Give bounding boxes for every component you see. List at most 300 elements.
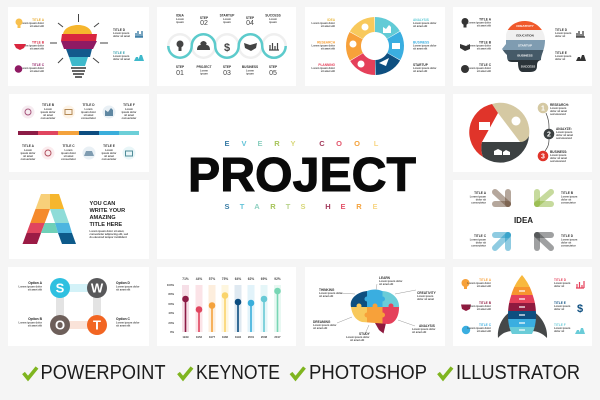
rocket fins [498,312,547,338]
tagline: starts here: E [340,202,346,211]
chart value tracks [182,285,281,332]
arrow labels: TITLE B [561,191,574,195]
brain labels: ANALYSIS [419,324,435,328]
left labels: sit amet elit [30,69,44,73]
arrow labels: dolor sit [561,198,571,202]
A panel heading: AMAZING [90,215,116,221]
ring icons [350,24,400,68]
bottom labels: STEP [223,65,232,69]
bottom labels: STEP [269,65,278,69]
brain labels: LEARN [379,276,391,280]
timeline bottom labels [21,144,116,161]
rocket left labels: TITLE A [479,278,492,282]
step badges: 1 [541,106,545,112]
step badges: 2 [547,132,551,138]
timeline top labels: ipsum dolor [81,110,96,114]
head left labels: sit amet elit [477,24,491,28]
head right labels and icons: dolor sit [555,57,565,61]
timeline top labels: consectetur [81,116,96,120]
A panel body text [90,229,129,239]
top labels: SUCCESS [265,14,281,18]
step connector [545,113,549,151]
chart percentages: 57% [209,277,215,281]
brain labels: dolor sit amet [417,297,434,301]
SWOT circles: O [55,318,65,332]
rocket right labels: TITLE F [554,323,566,327]
chart percentages: 75% [222,277,228,281]
A panel heading [90,201,125,228]
SWOT labels: sit amet elit [28,324,42,328]
arrow labels: Lorem ipsum [470,238,487,242]
timeline bottom labels: consectetur [102,157,116,161]
timeline top labels: Lorem [85,107,93,111]
panel: timeline [9,94,149,172]
head left labels: sit amet elit [477,69,491,73]
arrow labels: TITLE D [561,234,574,238]
panel: lightbulb infographic [8,7,149,86]
brain puzzle pieces [350,290,400,324]
letter A mosaic [22,194,76,244]
panel: triangle cycle [453,94,592,172]
check: photoshop [291,368,304,378]
A panel heading: YOU CAN [90,201,115,207]
arrow green [537,192,551,204]
brain labels: THINKING [319,288,335,292]
timeline top labels: sit amet [43,113,53,117]
chart percentages: 62% [248,277,254,281]
tagline: every cool: Y [290,139,296,148]
arrow brown [495,192,508,204]
SWOT labels: sit amet elit [116,324,130,328]
top labels: Lorem [223,17,232,21]
top labels [176,14,281,27]
arrow labels: Lorem ipsum [470,194,487,198]
head layer labels [516,24,535,68]
ring left labels [312,18,336,73]
rocket right labels [554,278,571,333]
brain labels: Lorem ipsum dolor [313,323,336,327]
tagline: every cool: L [374,139,379,148]
ring left labels: Lorem ipsum dolor [312,44,335,48]
brain labels: sit amet elit [313,326,327,330]
brain labels: sit amet elit [412,330,426,334]
rocket left labels: sit amet elit [477,329,491,333]
head layer labels: SUCCESS [521,64,535,68]
head right labels and icons [555,28,586,61]
timeline top labels: TITLE F [123,103,135,107]
SWOT labels: Lorem ipsum dolor [116,320,140,324]
chart percentages [182,277,281,281]
rocket right labels: Lorem ipsum [554,281,571,285]
rocket left labels [468,278,492,333]
step labels: BUSINESS: [550,150,567,154]
right labels [113,28,130,61]
chart percentages: 71% [182,277,189,281]
brain labels: sit amet elit [319,294,333,298]
timeline bottom labels: ipsum dolor [102,151,116,155]
step labels: Lorem ipsum [556,130,573,134]
brain labels: sit amet elit [350,338,364,342]
label: powerpoint: POWERPOINT [40,362,166,384]
head layer labels: EDUCATION [516,34,534,38]
chart y axis: 80% [168,292,175,296]
SWOT circles: T [93,318,101,332]
ring left labels: IDEA [327,18,336,22]
right icons [134,31,144,61]
timeline top labels: sit amet [84,113,94,117]
tagline: starts here: T [286,202,291,211]
left icons [14,18,26,73]
wave light circles [168,34,286,58]
check: powerpoint [24,368,37,378]
rocket right labels: TITLE D [554,278,567,282]
check: keynote [178,368,192,378]
arrow labels: TITLE C [474,234,487,238]
SWOT labels: sit amet elit [28,288,42,292]
chart x axis: 1982 [222,335,229,339]
bottom labels: Lorem [246,68,255,72]
panel: lollipop chart [157,267,296,346]
arrow labels: consectetur [471,244,486,248]
tagline: starts here: T [240,202,245,211]
red segment [469,104,498,157]
step labels: sed eiusmod [556,136,572,140]
chart y axis: 20% [168,321,175,325]
arrow labels: Lorem ipsum [561,238,578,242]
ring left labels: sit amet elit [321,69,335,73]
ring right labels: BUSINESS [413,40,429,44]
chart y axis: 60% [168,302,175,306]
head right labels and icons: Lorem ipsum [555,31,572,35]
timeline bottom labels: sit amet [64,154,74,158]
head left labels: TITLE C [479,63,492,67]
SWOT labels: Lorem ipsum dolor [18,284,42,288]
tagline: starts here: R [356,202,362,211]
tagline: every cool: R [274,139,280,148]
panel: central title [157,94,445,259]
right labels: TITLE D [113,28,126,32]
arrow labels: Lorem ipsum [561,194,578,198]
footer: software list [24,362,580,384]
left labels: sit amet elit [30,24,44,28]
SWOT connectors [56,284,101,329]
ring right labels: Lorem ipsum dolor [413,21,436,25]
step labels: sed eiusmod [550,159,566,163]
wave icons: $ [224,42,230,54]
chart x axis: 1949 [182,335,189,339]
tagline: starts here: H [325,202,331,211]
panel: cycle ring [305,7,445,86]
timeline bottom labels: TITLE A [22,144,35,148]
timeline bottom labels: TITLE E [103,144,115,148]
arrow grey [537,235,551,248]
brain labels: CREATIVITY [417,291,437,295]
segment icons [479,116,520,155]
right labels: Lorem ipsum [113,54,130,58]
ring right labels: sit amet elit [413,24,427,28]
timeline top labels: sit amet [124,113,134,117]
chart percentages: 64% [235,277,241,281]
timeline bottom labels: sit amet [23,154,33,158]
A panel heading: WRITE YOUR [90,208,125,214]
check: illustrator [438,368,452,378]
left labels: Lorem ipsum dolor [20,66,44,70]
chart x axis: 1952 [196,335,203,339]
timeline bottom labels: TITLE C [62,144,75,148]
panel: rocket [453,267,592,346]
brain leader lines [337,284,416,334]
SWOT labels: Option B [28,317,43,321]
step badges [538,103,554,161]
brain labels [313,276,437,342]
rocket body [508,275,536,334]
chart y axis: 100% [167,283,175,287]
lightbulb layers [61,25,97,77]
timeline bottom labels: ipsum dolor [21,151,35,155]
SWOT labels [18,281,140,328]
chart y axis: 0% [170,330,175,334]
timeline top labels [41,103,136,120]
brain labels: STUDY [359,332,371,336]
bottom labels: STEP [176,65,185,69]
timeline top labels: ipsum dolor [122,110,136,114]
rocket left labels: TITLE C [479,323,492,327]
bottom labels: 05 [269,70,277,77]
top labels: 02 [200,20,208,27]
step labels [550,103,573,163]
A panel heading: TITLE HERE [90,222,122,228]
head layer labels: BUSINESS [517,54,533,58]
bottom labels: BUSINESS [242,65,258,69]
ring left labels: Lorem ipsum dolor [312,21,335,25]
right labels: TITLE E [113,51,125,55]
left labels: Lorem ipsum dolor [20,21,44,25]
title: project: PROJECT [188,149,416,202]
step labels: dolor sit amet [556,133,573,137]
ring right labels: Lorem ipsum dolor [413,66,436,70]
SWOT circles: S [56,280,65,296]
head left labels: TITLE B [479,40,492,44]
timeline bottom labels: ipsum dolor [61,151,76,155]
SWOT labels: sit amet elit [116,288,130,292]
chart x axis: 2001 [248,335,255,339]
timeline top labels: ipsum dolor [41,110,55,114]
tagline: starts here: R [270,202,276,211]
head right labels and icons: TITLE E [555,51,567,55]
SWOT labels: Option C [116,317,131,321]
timeline bottom labels: Lorem [105,148,114,152]
SWOT labels: Option D [116,281,131,285]
arrow labels: dolor sit [561,240,571,244]
rocket right labels: dolor sit [554,329,564,333]
lightbulb rays [50,14,108,63]
tagline: every cool: O [336,139,342,148]
label: keynote: KEYNOTE [196,362,280,384]
panel: wave steps [157,7,296,86]
left labels: TITLE C [32,63,45,67]
arrow labels: consectetur [561,200,576,204]
brain labels: sit amet elit [379,282,393,286]
head layers [502,21,545,72]
rocket right labels: dolor sit [554,307,564,311]
top labels: STEP [246,16,255,20]
left labels: TITLE B [32,40,45,44]
head left labels: sit amet elit [477,46,491,50]
bottom labels: 01 [176,70,184,77]
ring left labels: Lorem ipsum dolor [312,66,335,70]
rocket right icons: $ [577,303,583,315]
arrow labels: dolor sit [476,240,486,244]
panel: SWOT [8,267,149,346]
top labels: ipsum [223,20,232,24]
ring right labels: sit amet elit [413,46,427,50]
rocket right labels: TITLE E [554,301,566,305]
arrow labels: TITLE A [474,191,487,195]
left labels: TITLE A [32,18,45,22]
A panel body text: do eiusmod tempor incididunt [90,235,127,239]
top labels: ipsum [176,20,185,24]
chart x axis: 1977 [209,335,216,339]
timeline bottom labels: Lorem [24,148,33,152]
chart percentages: 44% [196,277,202,281]
ring right labels [413,18,436,73]
step labels: dolor sit amet [550,109,567,113]
head left icons [460,18,470,73]
head layer labels: CREATIVITY [516,24,534,28]
left labels: sit amet elit [30,46,44,50]
brain labels: DREAMING [313,320,331,324]
top labels: STARTUP [220,14,235,18]
brain labels: Lorem ipsum dolor [412,327,436,331]
timeline top labels: consectetur [122,116,136,120]
ring left labels: PLANNING [318,63,336,67]
head layer labels: STARTUP [518,44,532,48]
right labels: dolor sit amet [113,34,130,38]
ring right labels: Lorem ipsum dolor [413,44,436,48]
ring left labels: sit amet elit [321,24,335,28]
tagline: starts here: A [254,202,260,211]
rocket left labels: Lorem ipsum dolor [468,304,491,308]
top labels: 04 [246,20,254,27]
head right labels and icons: dolor sit [555,34,565,38]
head left labels [468,18,492,73]
step labels: dolor sit amet [550,156,567,160]
right labels: dolor sit amet [113,57,130,61]
bottom labels: ipsum [246,72,255,76]
SWOT labels: Lorem ipsum dolor [116,284,140,288]
panel: letter A [9,180,149,259]
rocket left labels: Lorem ipsum dolor [468,281,491,285]
chart stems [186,291,278,332]
step labels: Lorem ipsum [550,106,567,110]
rocket right labels: Lorem ipsum [554,304,571,308]
tagline: starts here: S [224,202,230,211]
ring right labels: sit amet elit [413,69,427,73]
SWOT labels: Option A [28,281,43,285]
tagline: starts here: E [372,202,378,211]
step labels: RESEARCH: [550,103,569,107]
bottom labels: PROJECT [196,65,212,69]
ring left labels: RESEARCH [317,40,336,44]
rocket right labels: Lorem ipsum [554,326,571,330]
timeline top labels: consectetur [41,116,55,120]
arrow blue [495,235,508,248]
brain stem [375,323,386,334]
panel: puzzle brain [305,267,445,346]
label: photoshop: PHOTOSHOP [309,362,427,384]
brain labels: Lorem ipsum dolor [379,279,402,283]
chart percentages: 92% [274,277,281,281]
chart dots [182,288,281,313]
panel: head profile [453,7,592,86]
brain labels: Lorem ipsum dolor [319,291,342,295]
rocket left icons [461,279,471,334]
rocket left labels: sit amet elit [477,307,491,311]
step labels: sed eiusmod [550,112,566,116]
top labels: STEP [200,16,209,20]
tagline: every cool: V [241,139,247,148]
head right labels and icons: Lorem ipsum [555,54,572,58]
chart y axis: 40% [168,311,175,315]
top labels: IDEA [176,14,185,18]
top labels: ipsum [269,20,278,24]
ring right labels: ANALYSIS [413,18,429,22]
timeline bottom labels: consectetur [61,157,76,161]
SWOT labels: Lorem ipsum dolor [18,320,42,324]
bottom labels: 03 [223,70,231,77]
brain labels: Lorem ipsum dolor [346,335,370,339]
timeline top labels: TITLE D [82,103,95,107]
dark segment [481,136,529,163]
bottom labels: Lorem [200,68,209,72]
tagline: every cool: E [257,139,263,148]
brain labels: Lorem ipsum [417,294,434,298]
timeline top labels: Lorem [44,107,53,111]
A panel body text: consectetur adipiscing elit, sed [90,232,129,236]
teal wave line [168,34,286,58]
tagline: starts here: S [300,202,306,211]
timeline icons [22,106,136,160]
tagline: every cool: O [354,139,360,148]
ring right labels: STARTUP [413,63,429,67]
tagline: every cool: E [224,139,230,148]
chart y axis [167,283,175,334]
arrow labels: consectetur [561,244,576,248]
arrow labels: dolor sit [476,198,486,202]
rocket left labels: Lorem ipsum dolor [468,326,491,330]
chart x axis: 1994 [235,335,242,339]
tagline: every cool: C [319,139,325,148]
panel: idea arrows [453,180,592,259]
right labels: Lorem ipsum [113,31,130,35]
ring segments [346,17,404,75]
SWOT circles [50,278,107,335]
timeline bar [18,131,139,135]
arrow labels [470,191,578,248]
left labels: Lorem ipsum dolor [20,44,44,48]
step labels: ANALYZE: [556,127,572,131]
rocket right labels: dolor sit [554,284,564,288]
timeline bottom labels: sit amet [104,154,114,158]
step labels: Lorem ipsum [550,153,567,157]
rocket left labels: TITLE B [479,301,492,305]
step badges: 3 [541,154,545,160]
chart x axis: 2017 [274,335,281,339]
SWOT circles: W [91,280,104,296]
timeline top labels: TITLE B [42,103,55,107]
bottom labels [176,65,278,77]
head left labels: Lorem ipsum dolor [468,44,491,48]
